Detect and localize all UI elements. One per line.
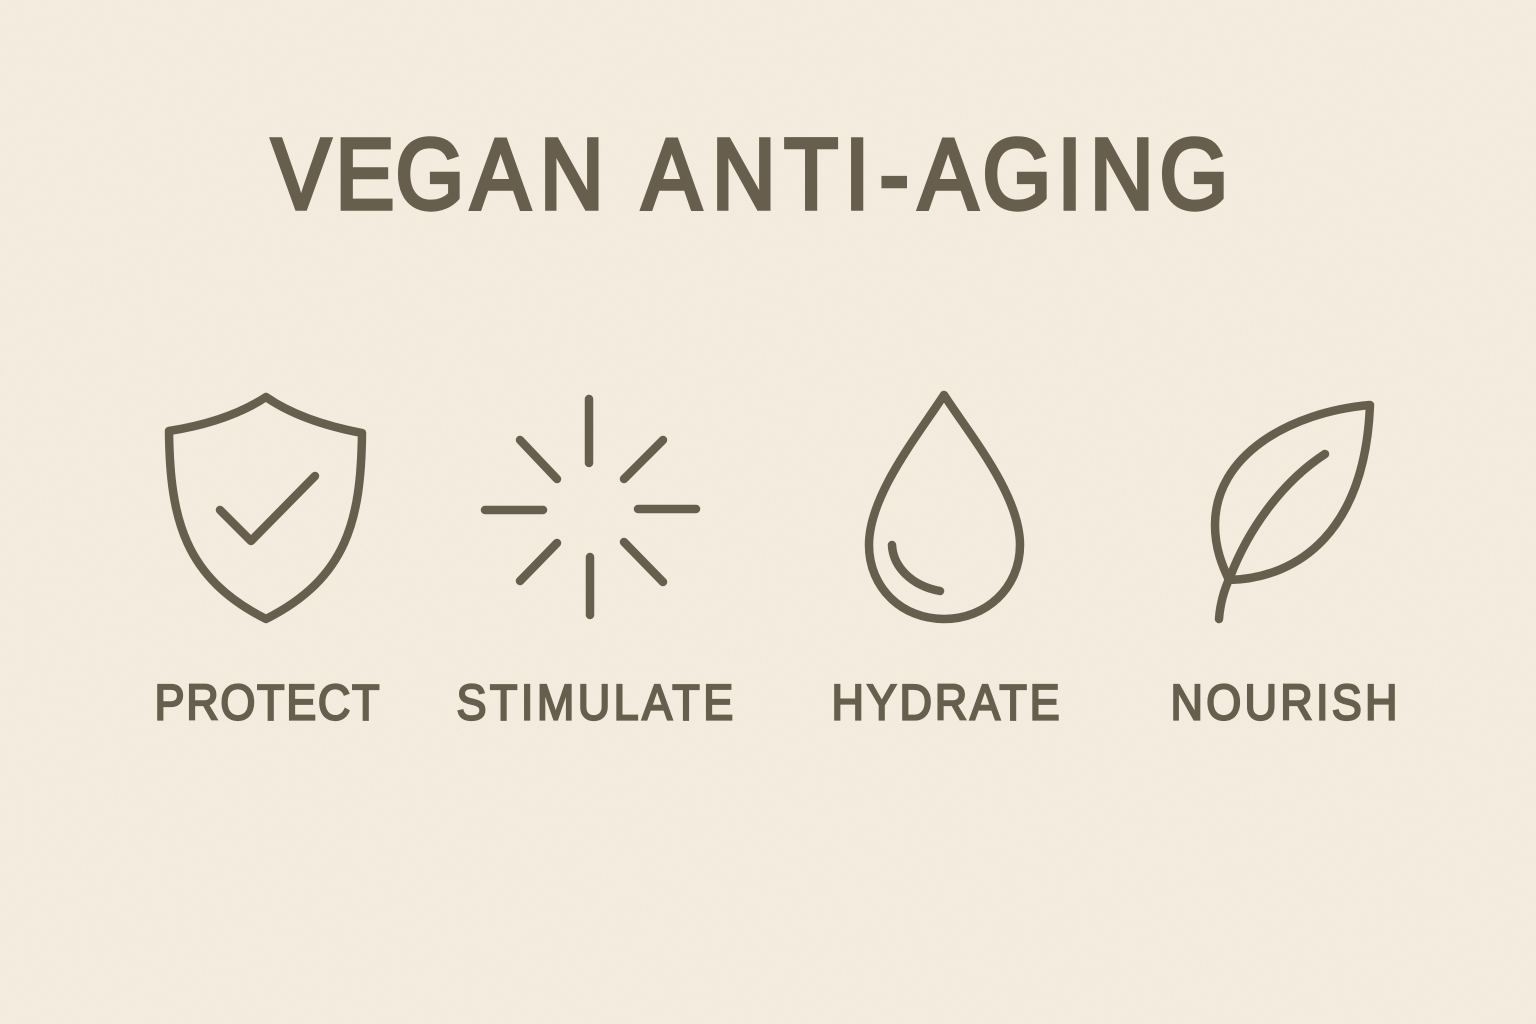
icon: leaf	[1215, 405, 1370, 619]
icon: shield with check	[169, 397, 362, 619]
title: VEGAN ANTI-AGING	[272, 118, 1228, 231]
icon: water drop	[869, 395, 1020, 619]
label: stimulate: STIMULATE	[456, 675, 733, 731]
icon: radiating burst	[485, 399, 696, 615]
label: hydrate: HYDRATE	[832, 675, 1060, 731]
label: nourish: NOURISH	[1171, 675, 1398, 731]
label: protect: PROTECT	[155, 675, 380, 731]
